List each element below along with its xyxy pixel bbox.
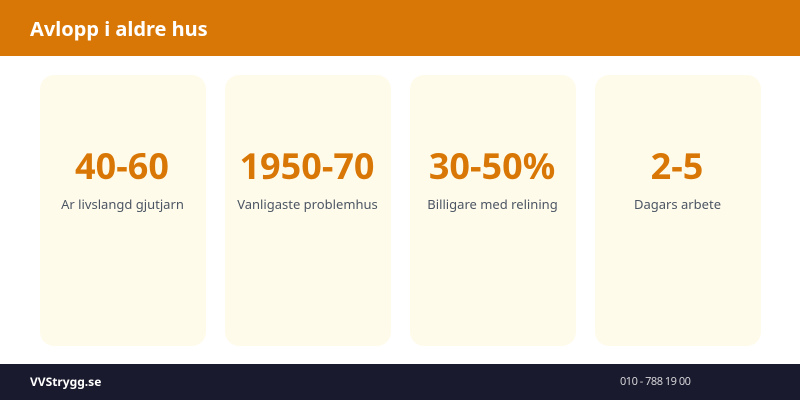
panel: problem houses (225, 75, 391, 346)
phone number: 010 - 788 19 00 (620, 374, 690, 389)
stat value: 1950-70 (239, 141, 375, 190)
title: Avlopp i aldre hus (30, 15, 208, 42)
panel: work duration (595, 75, 761, 346)
footer bar (0, 364, 800, 400)
header bar (0, 0, 800, 56)
stat value: 30-50% (429, 141, 555, 190)
stat value: 40-60 (75, 141, 169, 190)
brand name: VVStrygg.se (30, 373, 101, 390)
stat label: Ar livslangd gjutjarn (61, 195, 184, 213)
stat label: Dagars arbete (634, 195, 721, 213)
stat label: Vanligaste problemhus (237, 195, 378, 213)
panel: relining savings (410, 75, 576, 346)
stat value: 2-5 (651, 141, 703, 190)
panel: lifespan (40, 75, 206, 346)
stat label: Billigare med relining (427, 195, 558, 213)
